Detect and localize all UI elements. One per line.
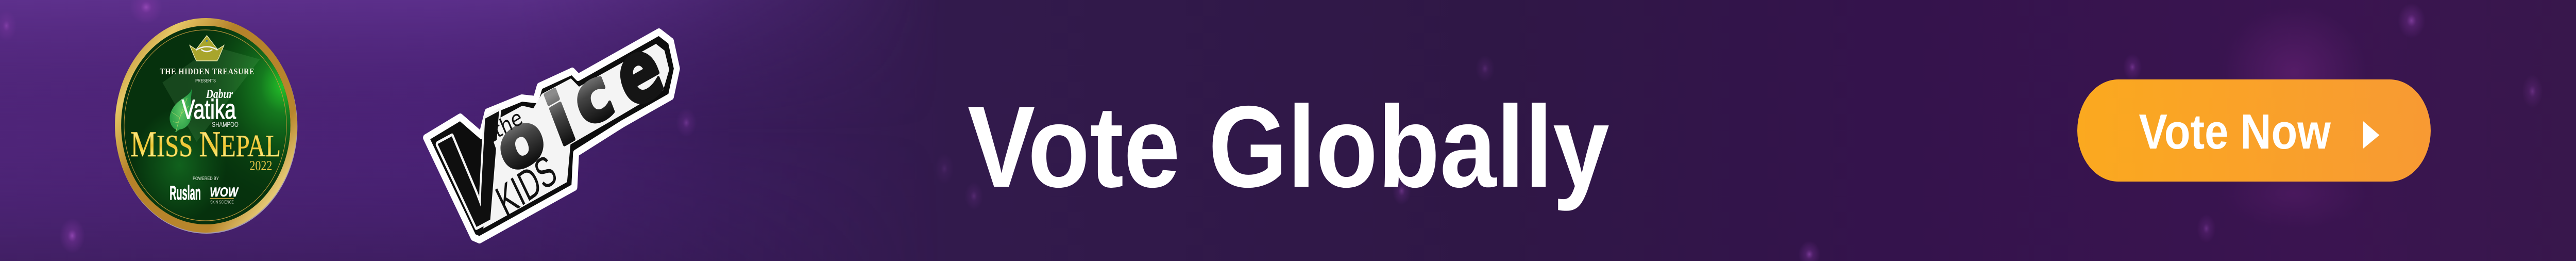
text: presents: PRESENTS bbox=[195, 78, 216, 84]
letter o: o bbox=[485, 94, 555, 190]
letter e: e bbox=[602, 17, 674, 128]
text: The Hidden Treasure: THE HIDDEN TREASURE bbox=[160, 67, 255, 76]
text: KIDS: KIDS bbox=[489, 145, 563, 225]
text: Dabur: Dabur bbox=[206, 87, 233, 101]
icon: play arrow bbox=[2363, 121, 2379, 149]
text: Vatika: Vatika bbox=[182, 94, 236, 125]
icon: crown bbox=[190, 36, 224, 61]
text: skin science: SKIN SCIENCE bbox=[210, 200, 234, 205]
text: 2022: 2022 bbox=[249, 158, 272, 174]
button label: Vote Now bbox=[2139, 104, 2331, 159]
heading: Vote Globally: Vote Globally bbox=[968, 81, 1609, 211]
letter c: c bbox=[562, 51, 623, 144]
text: Miss Nepal: MISS NEPAL bbox=[130, 124, 281, 165]
text: powered by: POWERED BY bbox=[193, 176, 219, 181]
text: the: the bbox=[490, 105, 526, 143]
button: Vote Now bbox=[2077, 79, 2431, 182]
letter i: i bbox=[537, 76, 585, 163]
text: Ruslan: Ruslan bbox=[170, 182, 201, 204]
text: shampoo: SHAMPOO bbox=[212, 120, 239, 128]
emblem: Miss Nepal badge bbox=[115, 18, 297, 234]
icon: leaf bbox=[170, 86, 192, 132]
logo: The Voice Kids bbox=[426, 17, 677, 261]
text: WOW: WOW bbox=[210, 185, 239, 199]
